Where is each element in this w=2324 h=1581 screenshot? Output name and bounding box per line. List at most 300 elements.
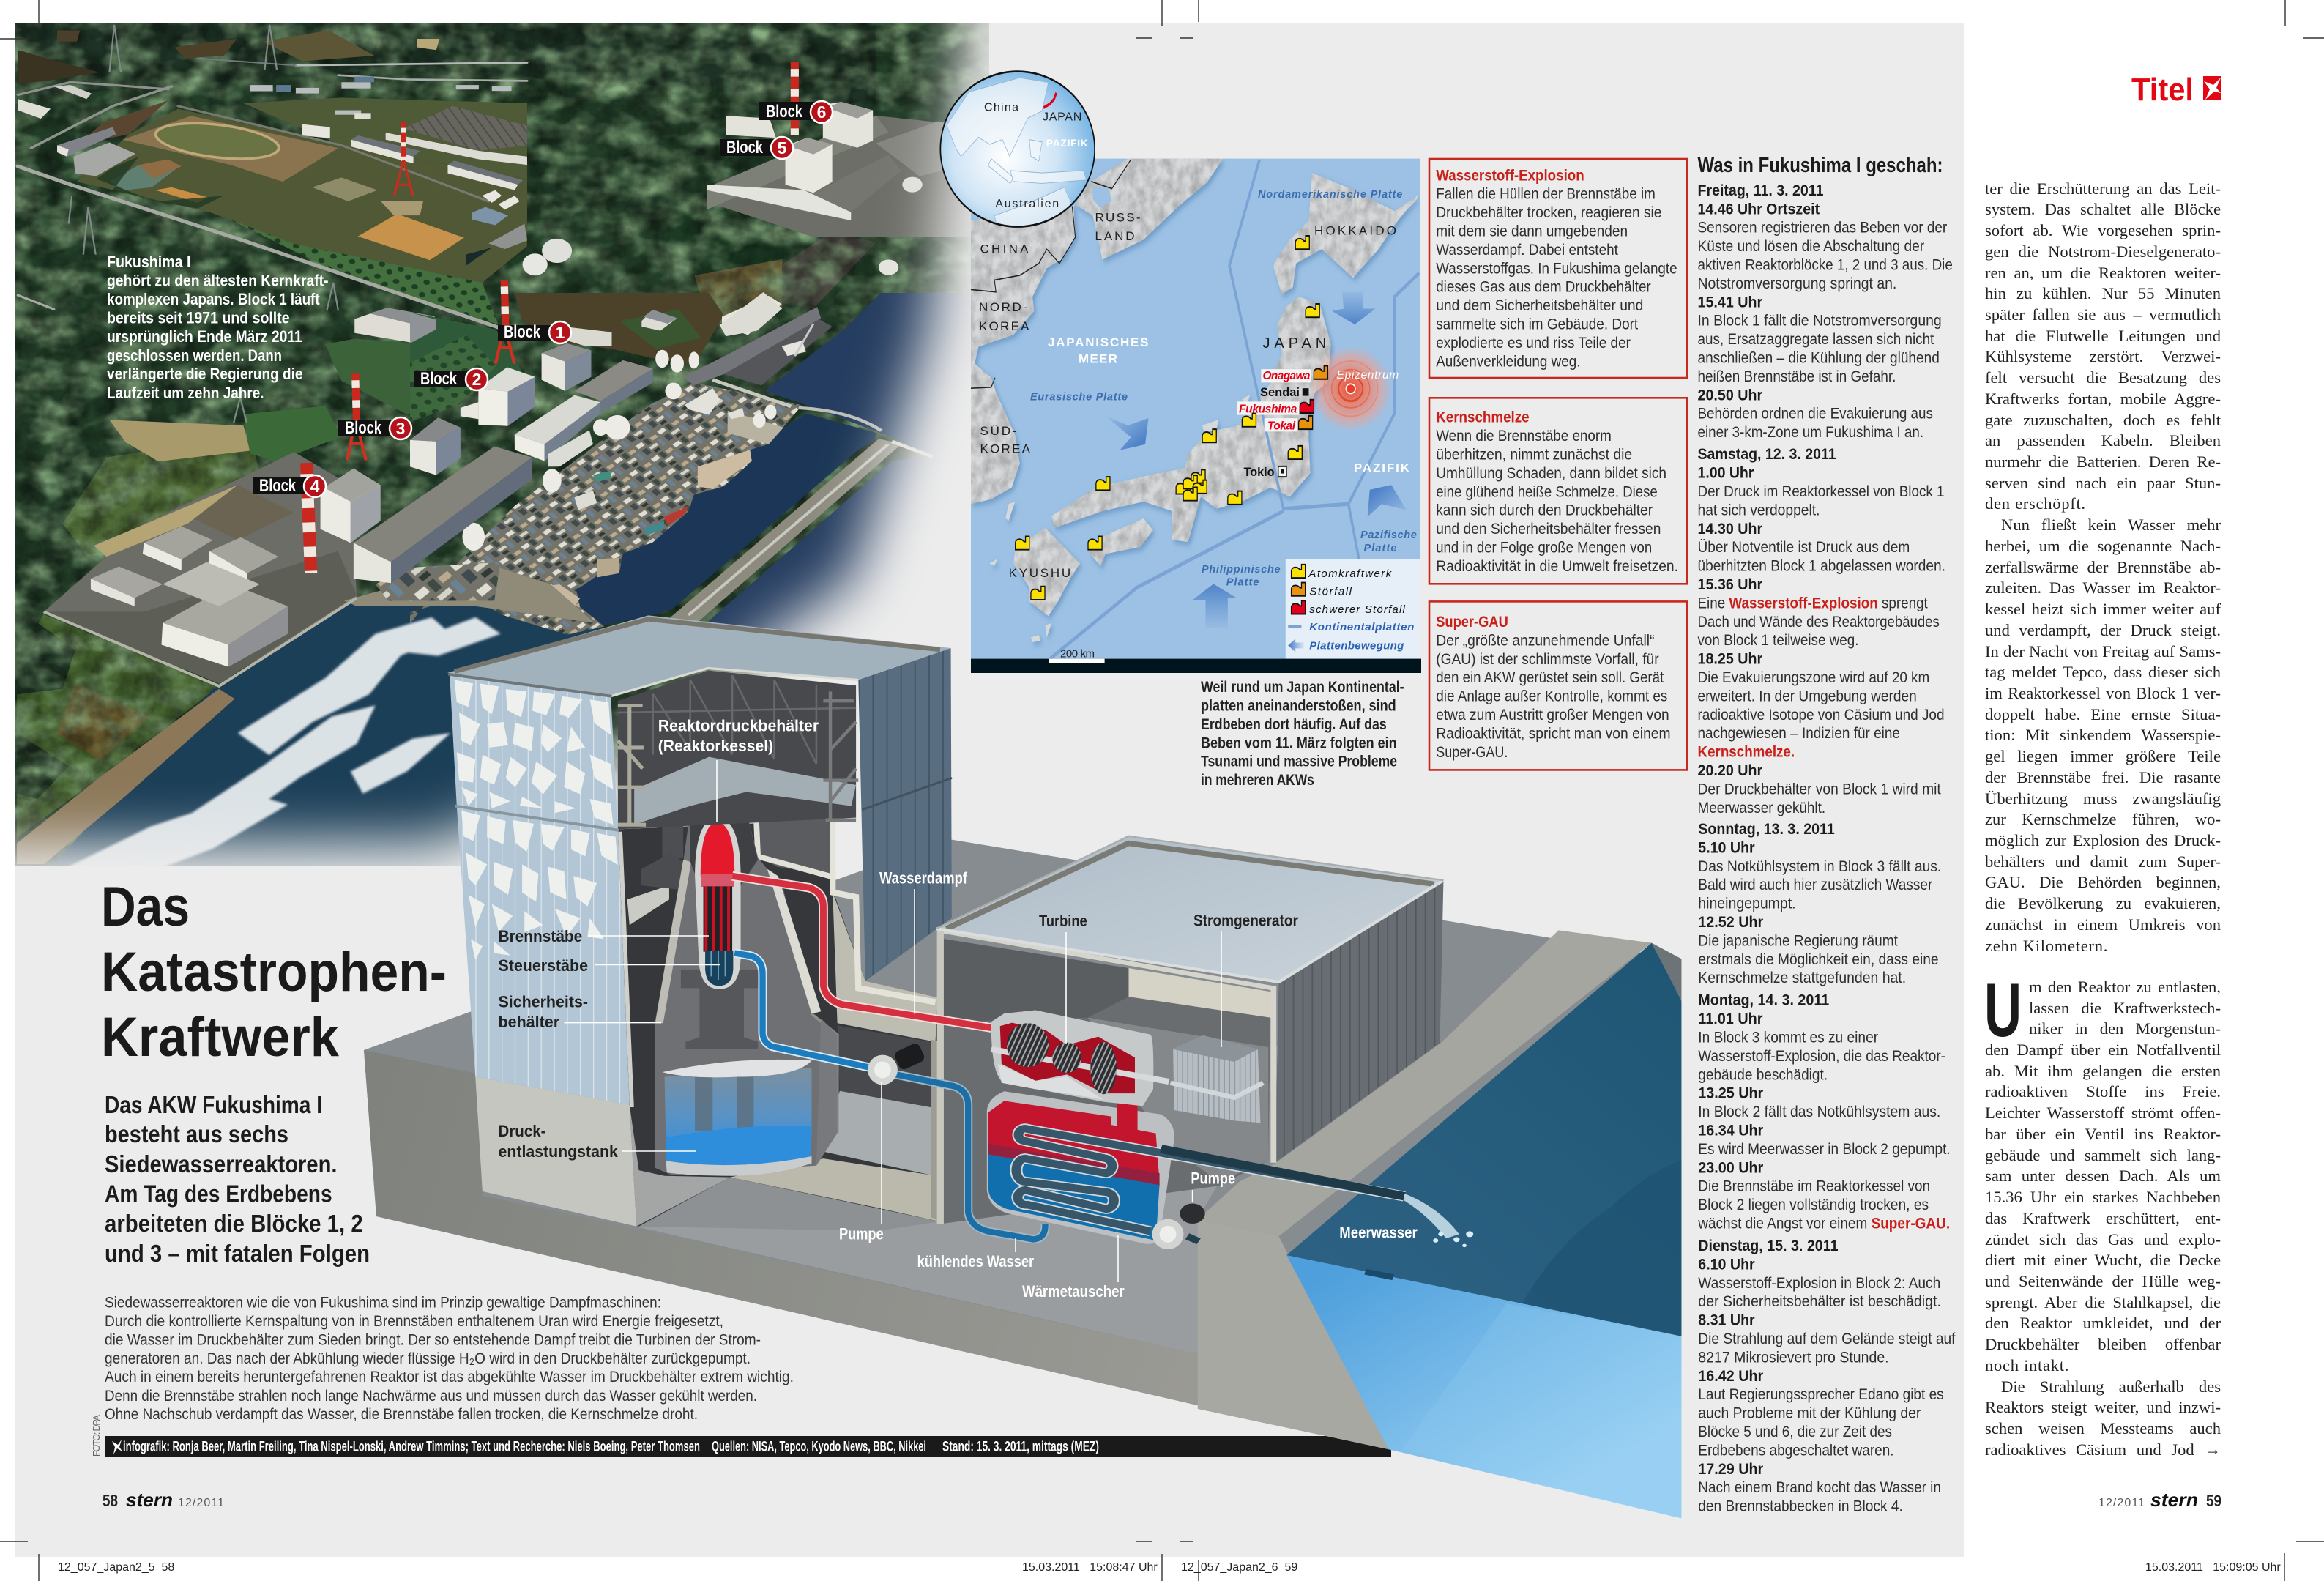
day: Samstag: Der Druckbehälter von Block 1 wird mit xyxy=(1697,780,1941,797)
plate motion arrows xyxy=(1106,292,1407,628)
article column, upper part: In der Nacht von Freitag auf Sams- xyxy=(1985,641,2221,661)
plate labels: Platte xyxy=(1363,543,1397,554)
legend labels: Störfall xyxy=(1309,586,1352,598)
day: Freitag: anschließen – die Kühlung der glühend xyxy=(1697,349,1940,366)
text block: Fukushima I on photo: Fukushima I xyxy=(107,253,190,271)
article column, upper part: doppelt habe. Eine ernste Situa- xyxy=(1985,705,2221,723)
day: Sonntag: Die japanische Regierung räumt xyxy=(1698,931,1898,949)
label: Reaktordruckbehälter: Reaktordruckbehälter xyxy=(658,717,819,735)
map labels xyxy=(979,211,1410,580)
timeline: chronology of events xyxy=(1697,182,1956,1515)
article column, lower part: zündet sich das Gas und explo- xyxy=(1985,1230,2221,1249)
day: Dienstag: 16.42 Uhr xyxy=(1698,1367,1764,1385)
plate labels: Pazifische xyxy=(1360,529,1417,541)
map caption: Beben vom 11. März folgten ein xyxy=(1201,734,1397,751)
article column, lower part: diert mit einer Wucht, die Decke xyxy=(1985,1251,2221,1269)
article column, lower part: niker in den Morgenstun- xyxy=(2029,1019,2221,1038)
concrete slab top xyxy=(364,839,1681,1449)
explainer box: Wasserstoff-Explosion: explodierte es und riss Teile der xyxy=(1436,334,1631,351)
sea surface xyxy=(1286,943,1681,1336)
map caption xyxy=(1201,678,1404,789)
day: Montag: 11.01 Uhr xyxy=(1698,1010,1763,1027)
article column, upper part: den erschöpft. xyxy=(1985,494,2086,513)
print slug lines: 15.03.2011 15:08:47 Uhr xyxy=(1022,1561,1158,1574)
map labels: JAPAN xyxy=(1262,335,1326,351)
day: Samstag: von Block 1 teilweise weg. xyxy=(1697,631,1858,649)
map labels: RUSS- xyxy=(1095,211,1141,224)
article column, lower part: ab. Mit ihm gelangen die ersten xyxy=(1985,1062,2221,1080)
roof xyxy=(447,615,951,696)
seawall top xyxy=(1198,930,1652,1236)
map labels: LAND xyxy=(1095,229,1135,243)
article column, lower part: den Dampf über ein Notfallventil xyxy=(1985,1041,2221,1059)
label: Block 4 xyxy=(253,475,326,497)
national borders xyxy=(971,160,1131,388)
day: Montag: 16.34 Uhr xyxy=(1698,1122,1764,1139)
label: Sicherheitsbehälter: behälter xyxy=(498,1013,560,1031)
wall end block xyxy=(1198,1219,1388,1449)
label: Block 3: Block xyxy=(345,418,381,438)
day: Dienstag: den Brennstabbecken in Block 4. xyxy=(1698,1498,1903,1515)
headline: Das xyxy=(101,876,190,938)
credit bar xyxy=(105,1436,1391,1457)
place labels: Sendai xyxy=(1260,385,1300,399)
article column, lower part: den Reaktor umkleidet, und der xyxy=(1985,1314,2221,1332)
article column, lower part: Die Strahlung außerhalb des xyxy=(2001,1377,2221,1396)
nuclear plant icons xyxy=(1016,236,1327,600)
day: Sonntag xyxy=(1698,820,1941,986)
place labels: Epizentrum xyxy=(1337,369,1399,382)
day: Dienstag: Nach einem Brand kocht das Wasser in xyxy=(1698,1478,1941,1496)
drop cap U: U xyxy=(1984,968,2022,1053)
folio right page: 12/2011 xyxy=(2098,1497,2145,1509)
article column, lower part: Druckbehälter bleiben offenbar xyxy=(1985,1335,2221,1353)
heat exchanger coil and sea pipe xyxy=(1016,1128,1404,1241)
photo: pylons xyxy=(69,25,338,423)
label: Druckentlastungstank: entlastungstank xyxy=(498,1142,619,1161)
article column, upper part: felt versucht die Besatzung des xyxy=(1985,368,2221,387)
label: Wasserdampf: Wasserdampf xyxy=(879,868,968,888)
subheadline: Das AKW Fukushima I xyxy=(105,1091,322,1118)
day: Freitag: Behörden ordnen die Evakuierung aus xyxy=(1697,405,1933,423)
text block: Fukushima I on photo: verlängerte die Regierung die xyxy=(107,365,303,383)
day: Montag: gebäude beschädigt. xyxy=(1698,1065,1828,1083)
day: Dienstag: auch Probleme mit der Kühlung der xyxy=(1698,1405,1921,1422)
reactor building xyxy=(447,615,952,1231)
folio left page: 12/2011 xyxy=(178,1497,224,1509)
tanks xyxy=(462,350,777,551)
explainer box: Wasserstoff-Explosion: dieses Gas aus dem Druckbehälter xyxy=(1436,278,1651,296)
subheadline: und 3 – mit fatalen Folgen xyxy=(105,1240,370,1267)
block labels on aerial photo xyxy=(253,101,833,497)
day: Freitag: aktiven Reaktorblöcke 1, 2 und 3 aus. Die xyxy=(1697,256,1953,274)
folio left page xyxy=(103,1489,224,1511)
explainer box: Kernschmelze xyxy=(1429,398,1687,584)
subheadline: besteht aus sechs xyxy=(105,1120,288,1147)
hall frame xyxy=(939,930,1273,1163)
locator globe: PAZIFIK xyxy=(1046,137,1088,149)
article column, upper part: zehn Kilometern. xyxy=(1985,937,2108,955)
article column, upper part xyxy=(1985,179,2221,955)
explanatory text: generatoren an. Das nach der Abkühlung wieder flüssige H₂O wird in den Druckbehälter zurückgepumpt. xyxy=(105,1350,751,1367)
lower concrete face xyxy=(475,1077,636,1227)
article column, lower part: schen weisen Messteams auch xyxy=(1985,1419,2221,1437)
label: Block 1: 1 xyxy=(556,323,565,342)
legend box xyxy=(1286,559,1420,659)
label: Block 2: Block xyxy=(420,369,457,389)
day: Dienstag: 6.10 Uhr xyxy=(1698,1255,1755,1273)
day: Sonntag: Bald wird auch hier zusätzlich Wasser xyxy=(1698,876,1932,893)
print slug lines xyxy=(58,1561,2281,1574)
turbine, generator and heat exchanger xyxy=(987,1010,1473,1249)
text block: Fukushima I on photo: ursprünglich Ende März 2011 xyxy=(107,327,302,346)
article column, upper part: zur Kernschmelze führen, wo- xyxy=(1985,810,2221,828)
photo ocean xyxy=(17,600,600,882)
explainer box: Wasserstoff-Explosion: Wasserstoffgas. In Fukushima gelangte xyxy=(1436,259,1677,277)
print slug lines: 12_057_Japan2_6 59 xyxy=(1181,1561,1297,1574)
label: Block 4: Block xyxy=(259,476,296,496)
article column, upper part: zerfallswärme der Brennstäbe ab- xyxy=(1985,558,2221,576)
day: Samstag: Samstag, 12. 3. 2011 xyxy=(1697,445,1836,463)
diagram labels xyxy=(498,717,1418,1301)
day: Sonntag: hineingepumpt. xyxy=(1698,895,1796,912)
label: Block 5 xyxy=(720,137,793,159)
label: Turbine: Turbine xyxy=(1039,912,1087,930)
day: Freitag: In Block 1 fällt die Notstromversorgung xyxy=(1697,312,1942,330)
day: Samstag xyxy=(1697,445,1945,816)
day: Sonntag: Kernschmelze stattgefunden hat. xyxy=(1698,969,1906,986)
place labels: Tokai xyxy=(1267,420,1296,433)
explainer box: Wasserstoff-Explosion: Druckbehälter trocken, reagieren sie xyxy=(1436,204,1661,221)
turbine hall xyxy=(936,836,1443,1224)
article column, upper part: gen die Notstrom-Dieselgenerato- xyxy=(1985,242,2221,261)
day: Samstag: nachgewiesen – Indizien für eine xyxy=(1697,724,1900,742)
plate boundaries xyxy=(1050,160,1419,659)
article column, upper part: Überhitzung muss zwangsläufig xyxy=(1985,789,2221,808)
day: Freitag: aus, Ersatzaggregate lassen sich nicht xyxy=(1697,330,1934,348)
map labels: KOREA xyxy=(980,442,1031,456)
explainer box: Kernschmelze: Wenn die Brennstäbe enorm xyxy=(1436,427,1612,444)
map scale bar: 200 km xyxy=(1060,648,1095,661)
photo credit: FOTO: DPA xyxy=(92,1414,102,1457)
article column, upper part: sofort ab. Wie vorgesehen sprin- xyxy=(1985,221,2221,239)
article column, upper part: Kühlsysteme zerstört. Verzwei- xyxy=(1985,347,2221,365)
legend labels: Plattenbewegung xyxy=(1309,640,1404,652)
explainer box: Wasserstoff-Explosion: und dem Sicherheitsbehälter und xyxy=(1436,297,1643,314)
map caption: Erdbeben dort häufig. Auf das xyxy=(1201,715,1387,733)
credit bar: infografik: Ronja Beer, Martin Freiling, Tina Nispel-Lonski, Andrew Timmins; Text und Recherche: Niels Boeing, Peter Thomsen xyxy=(123,1440,700,1455)
reactor block 2 xyxy=(478,367,535,392)
label: Meerwasser: Meerwasser xyxy=(1339,1224,1418,1242)
day: Freitag: 15.41 Uhr xyxy=(1697,293,1763,310)
day: Dienstag: Laut Regierungssprecher Edano gibt es xyxy=(1698,1385,1944,1403)
label: Druckentlastungstank xyxy=(498,1122,619,1161)
article column, lower part: und Seitenwände der Hülle weg- xyxy=(1985,1272,2221,1290)
day: Dienstag: Erdbebens abgeschaltet waren. xyxy=(1698,1441,1894,1459)
day: Dienstag: Blöcke 5 und 6, die zur Zeit des xyxy=(1698,1423,1892,1440)
day: Samstag: Eine Wasserstoff-Explosion sprengt xyxy=(1697,594,1928,611)
containment vessel xyxy=(655,811,838,1175)
map labels: KYUSHU xyxy=(1009,566,1070,580)
reactor pressure vessel xyxy=(695,816,741,989)
locator globe: JAPAN xyxy=(1043,111,1081,124)
day: Sonntag: Das Notkühlsystem in Block 3 fällt aus. xyxy=(1698,858,1941,875)
hall right wall xyxy=(1275,880,1443,1163)
article column, lower part: das Kraftwerk erschüttert, ent- xyxy=(1985,1209,2221,1227)
label: kühlendes Wasser: kühlendes Wasser xyxy=(917,1252,1034,1271)
day: Samstag: Meerwasser gekühlt. xyxy=(1697,799,1825,816)
day: Sonntag: 12.52 Uhr xyxy=(1698,913,1764,931)
day: Montag: 13.25 Uhr xyxy=(1698,1085,1764,1102)
concrete front wall xyxy=(364,1050,1388,1449)
label: Wärmetauscher: Wärmetauscher xyxy=(1022,1282,1125,1301)
day: Montag: Block 2 liegen vollständig trocken, es xyxy=(1698,1196,1929,1213)
explanatory text: Durch die kontrollierte Kernspaltung von in Brennstäben enthaltenem Uran wird Energie freigesetzt, xyxy=(105,1312,723,1330)
city markers xyxy=(1278,388,1308,477)
day: Freitag: Küste und lösen die Abschaltung der xyxy=(1697,237,1924,255)
map caption: Tsunami und massive Probleme xyxy=(1201,753,1397,770)
locator globe xyxy=(940,72,1095,239)
article column, upper part: herbei, um die sogenannte Nach- xyxy=(1985,537,2221,555)
plate labels: Philippinische xyxy=(1202,564,1281,576)
article column, upper part: gel liegen immer größere Teile xyxy=(1985,747,2221,765)
site ground xyxy=(410,382,802,635)
article column, upper part: und verdampft, der Druck steigt. xyxy=(1985,621,2221,639)
day: Montag xyxy=(1697,992,1951,1232)
day: Samstag: hat sich verdoppelt. xyxy=(1697,501,1820,518)
label: Block 2: 2 xyxy=(472,370,481,389)
explainer box: Super-GAU: den ein AKW gerüstet sein soll. Gerät xyxy=(1436,669,1664,686)
map labels: JAPANISCHES xyxy=(1048,335,1148,349)
blue return pipes xyxy=(734,953,1045,1240)
day: Freitag: Freitag, 11. 3. 2011 xyxy=(1697,182,1824,199)
article column, upper part: GAU. Die Behörden beginnen, xyxy=(1985,873,2221,891)
day: Sonntag: Sonntag, 13. 3. 2011 xyxy=(1698,820,1835,838)
place name backgrounds xyxy=(1237,369,1311,431)
label: Block 6: Block xyxy=(766,102,802,122)
map caption: Weil rund um Japan Kontinental- xyxy=(1201,678,1404,696)
label: Sicherheitsbehälter: Sicherheits- xyxy=(498,993,588,1011)
article column, lower part: radioaktiven Stoffe ins Freie. xyxy=(1985,1082,2221,1101)
day: Montag: Wasserstoff-Explosion, die das Reaktor- xyxy=(1698,1047,1945,1065)
explanatory text: Siedewasserreaktoren wie die von Fukushima sind im Prinzip gewaltige Dampfmaschinen: xyxy=(105,1293,661,1311)
article column, lower part: noch intakt. xyxy=(1985,1356,2069,1374)
legend labels: Atomkraftwerk xyxy=(1308,568,1393,580)
article column, lower part: Reaktors steigt weiter, und inzwi- xyxy=(1985,1398,2221,1416)
article column, upper part: ter die Erschütterung an das Leit- xyxy=(1985,179,2221,198)
facade upper and lower xyxy=(450,675,618,830)
label: Block 1 xyxy=(498,321,571,343)
day: Montag: wächst die Angst vor einem Super-GAU. xyxy=(1697,1214,1950,1232)
photo: plant site xyxy=(410,293,963,635)
day: Samstag: 20.20 Uhr xyxy=(1697,762,1763,779)
upper hall interior xyxy=(618,671,856,830)
photo: west buildings and blocks xyxy=(44,102,981,686)
headline: Katastrophen- xyxy=(101,941,447,1003)
map land masses xyxy=(969,154,1423,659)
day: Freitag: einer 3-km-Zone um Fukushima I an. xyxy=(1697,423,1923,441)
day: Samstag: Der Druck im Reaktorkessel von Block 1 xyxy=(1697,483,1945,500)
folio right page: 59 xyxy=(2206,1492,2221,1510)
turbine halls xyxy=(574,360,653,401)
label: Block 6 xyxy=(759,101,833,123)
day: Dienstag: der Sicherheitsbehälter ist beschädigt. xyxy=(1698,1292,1941,1310)
day: Dienstag: Dienstag, 15. 3. 2011 xyxy=(1698,1237,1839,1254)
hall interior xyxy=(942,939,1271,1224)
photo: upper-left grounds xyxy=(18,30,527,461)
timeline heading: Was in Fukushima I geschah: xyxy=(1697,154,1943,177)
label: Block 5: Block xyxy=(726,138,763,157)
map labels: MEER xyxy=(1079,352,1117,366)
lower interior xyxy=(618,820,940,1227)
label: Druckentlastungstank: Druck- xyxy=(498,1122,546,1140)
reactor block 3 xyxy=(410,417,461,442)
label: Block 3 xyxy=(338,417,411,439)
explainer box: Super-GAU: die Anlage außer Kontrolle, kommt es xyxy=(1436,688,1667,705)
article column, upper part: ren an, um die Reaktoren weiter- xyxy=(1985,264,2221,282)
locator globe: Australien xyxy=(995,198,1059,210)
credit bar: Stand: 15. 3. 2011, mittags (MEZ) xyxy=(942,1440,1099,1455)
explainer box: Wasserstoff-Explosion: Wasserstoff-Explosion xyxy=(1436,166,1584,184)
plate labels xyxy=(1030,189,1417,589)
turbine xyxy=(991,1010,1169,1106)
legend labels xyxy=(1308,568,1414,652)
explainer box: Kernschmelze: kann sich durch den Druckbehälter xyxy=(1436,502,1653,519)
subheadline: arbeiteten die Blöcke 1, 2 xyxy=(105,1210,363,1237)
explainer box: Kernschmelze: Kernschmelze xyxy=(1436,409,1530,426)
label: Block 2 xyxy=(414,368,488,390)
day: Freitag: Notstromversorgung springt an. xyxy=(1697,275,1896,292)
label: Stromgenerator: Stromgenerator xyxy=(1193,912,1298,930)
upper right buildings xyxy=(722,296,782,335)
article column, lower part: Leichter Wasserstoff strömt offen- xyxy=(1985,1104,2221,1122)
day: Montag: Es wird Meerwasser in Block 2 gepumpt. xyxy=(1698,1140,1951,1158)
day: Samstag: 15.36 Uhr xyxy=(1697,576,1763,593)
plate labels: Eurasische Platte xyxy=(1030,391,1128,403)
article column, lower part: 15.36 Uhr ein starkes Nachbeben xyxy=(1985,1188,2221,1206)
generator xyxy=(1171,1035,1263,1123)
folio right page: stern xyxy=(2150,1489,2198,1511)
explainer box: Super-GAU: Radioaktivität, spricht man von einem xyxy=(1436,724,1671,742)
explainer box: Super-GAU: (GAU) ist der schlimmste Vorfall, für xyxy=(1436,650,1659,668)
label: Steuerstäbe: Steuerstäbe xyxy=(498,956,588,975)
text block: Fukushima I on photo xyxy=(107,253,328,402)
folio left page: stern xyxy=(126,1489,173,1511)
pit floor xyxy=(636,1025,1296,1354)
legend labels: schwerer Störfall xyxy=(1309,603,1405,616)
map scale bar xyxy=(1049,648,1105,663)
explainer box: Kernschmelze: und den Sicherheitsbehälter fressen xyxy=(1436,520,1661,537)
label: Reaktordruckbehälter xyxy=(658,717,819,755)
coolant and steam pipes xyxy=(732,876,1045,1240)
explainer box: Wasserstoff-Explosion: Wasserdampf. Dabei entsteht xyxy=(1436,241,1618,258)
day: Dienstag: Wasserstoff-Explosion in Block 2: Auch xyxy=(1698,1274,1940,1292)
explainer box: Wasserstoff-Explosion xyxy=(1429,159,1687,378)
explainer box: Wasserstoff-Explosion: Fallen die Hüllen der Brennstäbe im xyxy=(1436,185,1656,203)
text block: Fukushima I on photo: Laufzeit um zehn Jahre. xyxy=(107,384,264,402)
label: Block 5: 5 xyxy=(778,138,787,157)
article column, upper part: möglich zur Explosion des Druck- xyxy=(1985,831,2221,849)
red steam pipe xyxy=(732,876,991,1028)
article column, upper part: der Brennstäbe frei. Die rasante xyxy=(1985,768,2221,786)
text block: Fukushima I on photo: gehört zu den ältesten Kernkraft- xyxy=(107,271,328,290)
epicentre rings xyxy=(1309,346,1392,431)
side wall right xyxy=(858,648,952,981)
article column, upper part: Kraftwerks fortan, mobile Aggre- xyxy=(1985,390,2221,408)
map of Japan xyxy=(969,154,1423,673)
day: Samstag: Die Evakuierungszone wird auf 20 km xyxy=(1697,669,1929,686)
day: Samstag: Kernschmelze. xyxy=(1697,743,1795,761)
facade debris shards xyxy=(455,680,613,825)
explainer box: Kernschmelze: überhitzen, nimmt zunächst die xyxy=(1436,445,1632,463)
article column, upper part: nurmehr die Batterien. Deren Re- xyxy=(1985,453,2221,471)
map labels: KOREA xyxy=(979,319,1029,333)
map labels: PAZIFIK xyxy=(1354,461,1410,475)
day: Dienstag: Die Strahlung auf dem Gelände steigt auf xyxy=(1698,1330,1956,1347)
article column, upper part: system. Das schaltet alle Blöcke xyxy=(1985,200,2221,218)
heat exchanger xyxy=(987,1091,1174,1244)
day: Montag: 23.00 Uhr xyxy=(1698,1158,1764,1176)
day: Samstag: 14.30 Uhr xyxy=(1697,520,1763,537)
article column, lower part: gebäude und sammelt sich lang- xyxy=(1985,1146,2221,1164)
photo fade overlay xyxy=(0,0,1098,1025)
day: Freitag xyxy=(1697,182,1953,441)
explainer box: Kernschmelze: und in der Folge große Mengen von xyxy=(1436,539,1652,557)
explainer box: Wasserstoff-Explosion: mit dem sie dann umgebenden xyxy=(1436,223,1628,240)
explainer box: Super-GAU: Der „größte anzunehmende Unfall“ xyxy=(1436,631,1655,649)
day: Sonntag: erstmals die Möglichkeit ein, dass eine xyxy=(1698,951,1939,968)
article column, upper part: tion: Mit sinkendem Wasserspie- xyxy=(1985,726,2221,744)
label: Sicherheitsbehälter xyxy=(498,993,588,1031)
day: Freitag: heißen Brennstäbe ist in Gefahr. xyxy=(1697,368,1896,385)
article column, lower part xyxy=(1985,978,2221,1459)
article column, upper part: behälters und damit zum Super- xyxy=(1985,852,2221,871)
label: Block 1: Block xyxy=(504,322,540,342)
outer sea xyxy=(709,293,963,633)
explainer box: Kernschmelze: eine glühend heiße Schmelze. Diese xyxy=(1436,483,1658,500)
day: Freitag: 20.50 Uhr xyxy=(1697,386,1763,403)
headline: Kraftwerk xyxy=(101,1006,340,1068)
place labels: Onagawa xyxy=(1262,370,1311,382)
sea water front xyxy=(1286,1255,1681,1518)
map bottom bar xyxy=(971,659,1421,673)
photo: chimneys xyxy=(307,62,794,573)
subheadline xyxy=(105,1091,370,1267)
day: Freitag: Sensoren registrieren das Beben vor der xyxy=(1697,219,1947,237)
explanatory text xyxy=(105,1293,794,1423)
day: Dienstag xyxy=(1698,1237,1956,1515)
map labels: HOKKAIDO xyxy=(1314,224,1396,238)
article column, upper part: gate zuzuschalten, doch es fehlt xyxy=(1985,411,2221,429)
article column, upper part: später fallen sie aus – vermutlich xyxy=(1985,305,2221,324)
label: Pumpe left: Pumpe xyxy=(839,1224,884,1243)
print slug lines: 15.03.2011 15:09:05 Uhr xyxy=(2145,1561,2281,1574)
label: Block 6: 6 xyxy=(817,103,826,122)
day: Samstag: überhitzten Block 1 abgelassen worden. xyxy=(1697,557,1945,575)
map caption: in mehreren AKWs xyxy=(1201,771,1314,789)
explainer box: Super-GAU: Super-GAU. xyxy=(1436,743,1508,761)
article column, upper part: im Reaktorkessel von Block 1 ver- xyxy=(1985,684,2221,702)
explainer box: Kernschmelze: Umhüllung Schaden, dann bildet sich xyxy=(1436,464,1666,482)
article column, lower part: sprengt. Aber die Stahlkapsel, die xyxy=(1985,1293,2221,1312)
headline xyxy=(101,876,447,1068)
section tag: Titel with stern logo: Titel xyxy=(2131,72,2194,108)
plate labels: Platte xyxy=(1226,577,1259,589)
label: Reaktordruckbehälter: (Reaktorkessel) xyxy=(658,737,773,755)
locator globe: China xyxy=(984,102,1018,114)
explanatory text: Denn die Brennstäbe strahlen noch lange Nachwärme aus und müssen durch das Wasser gekühlt werden. xyxy=(105,1387,757,1405)
breakwater and bridge xyxy=(670,439,901,622)
